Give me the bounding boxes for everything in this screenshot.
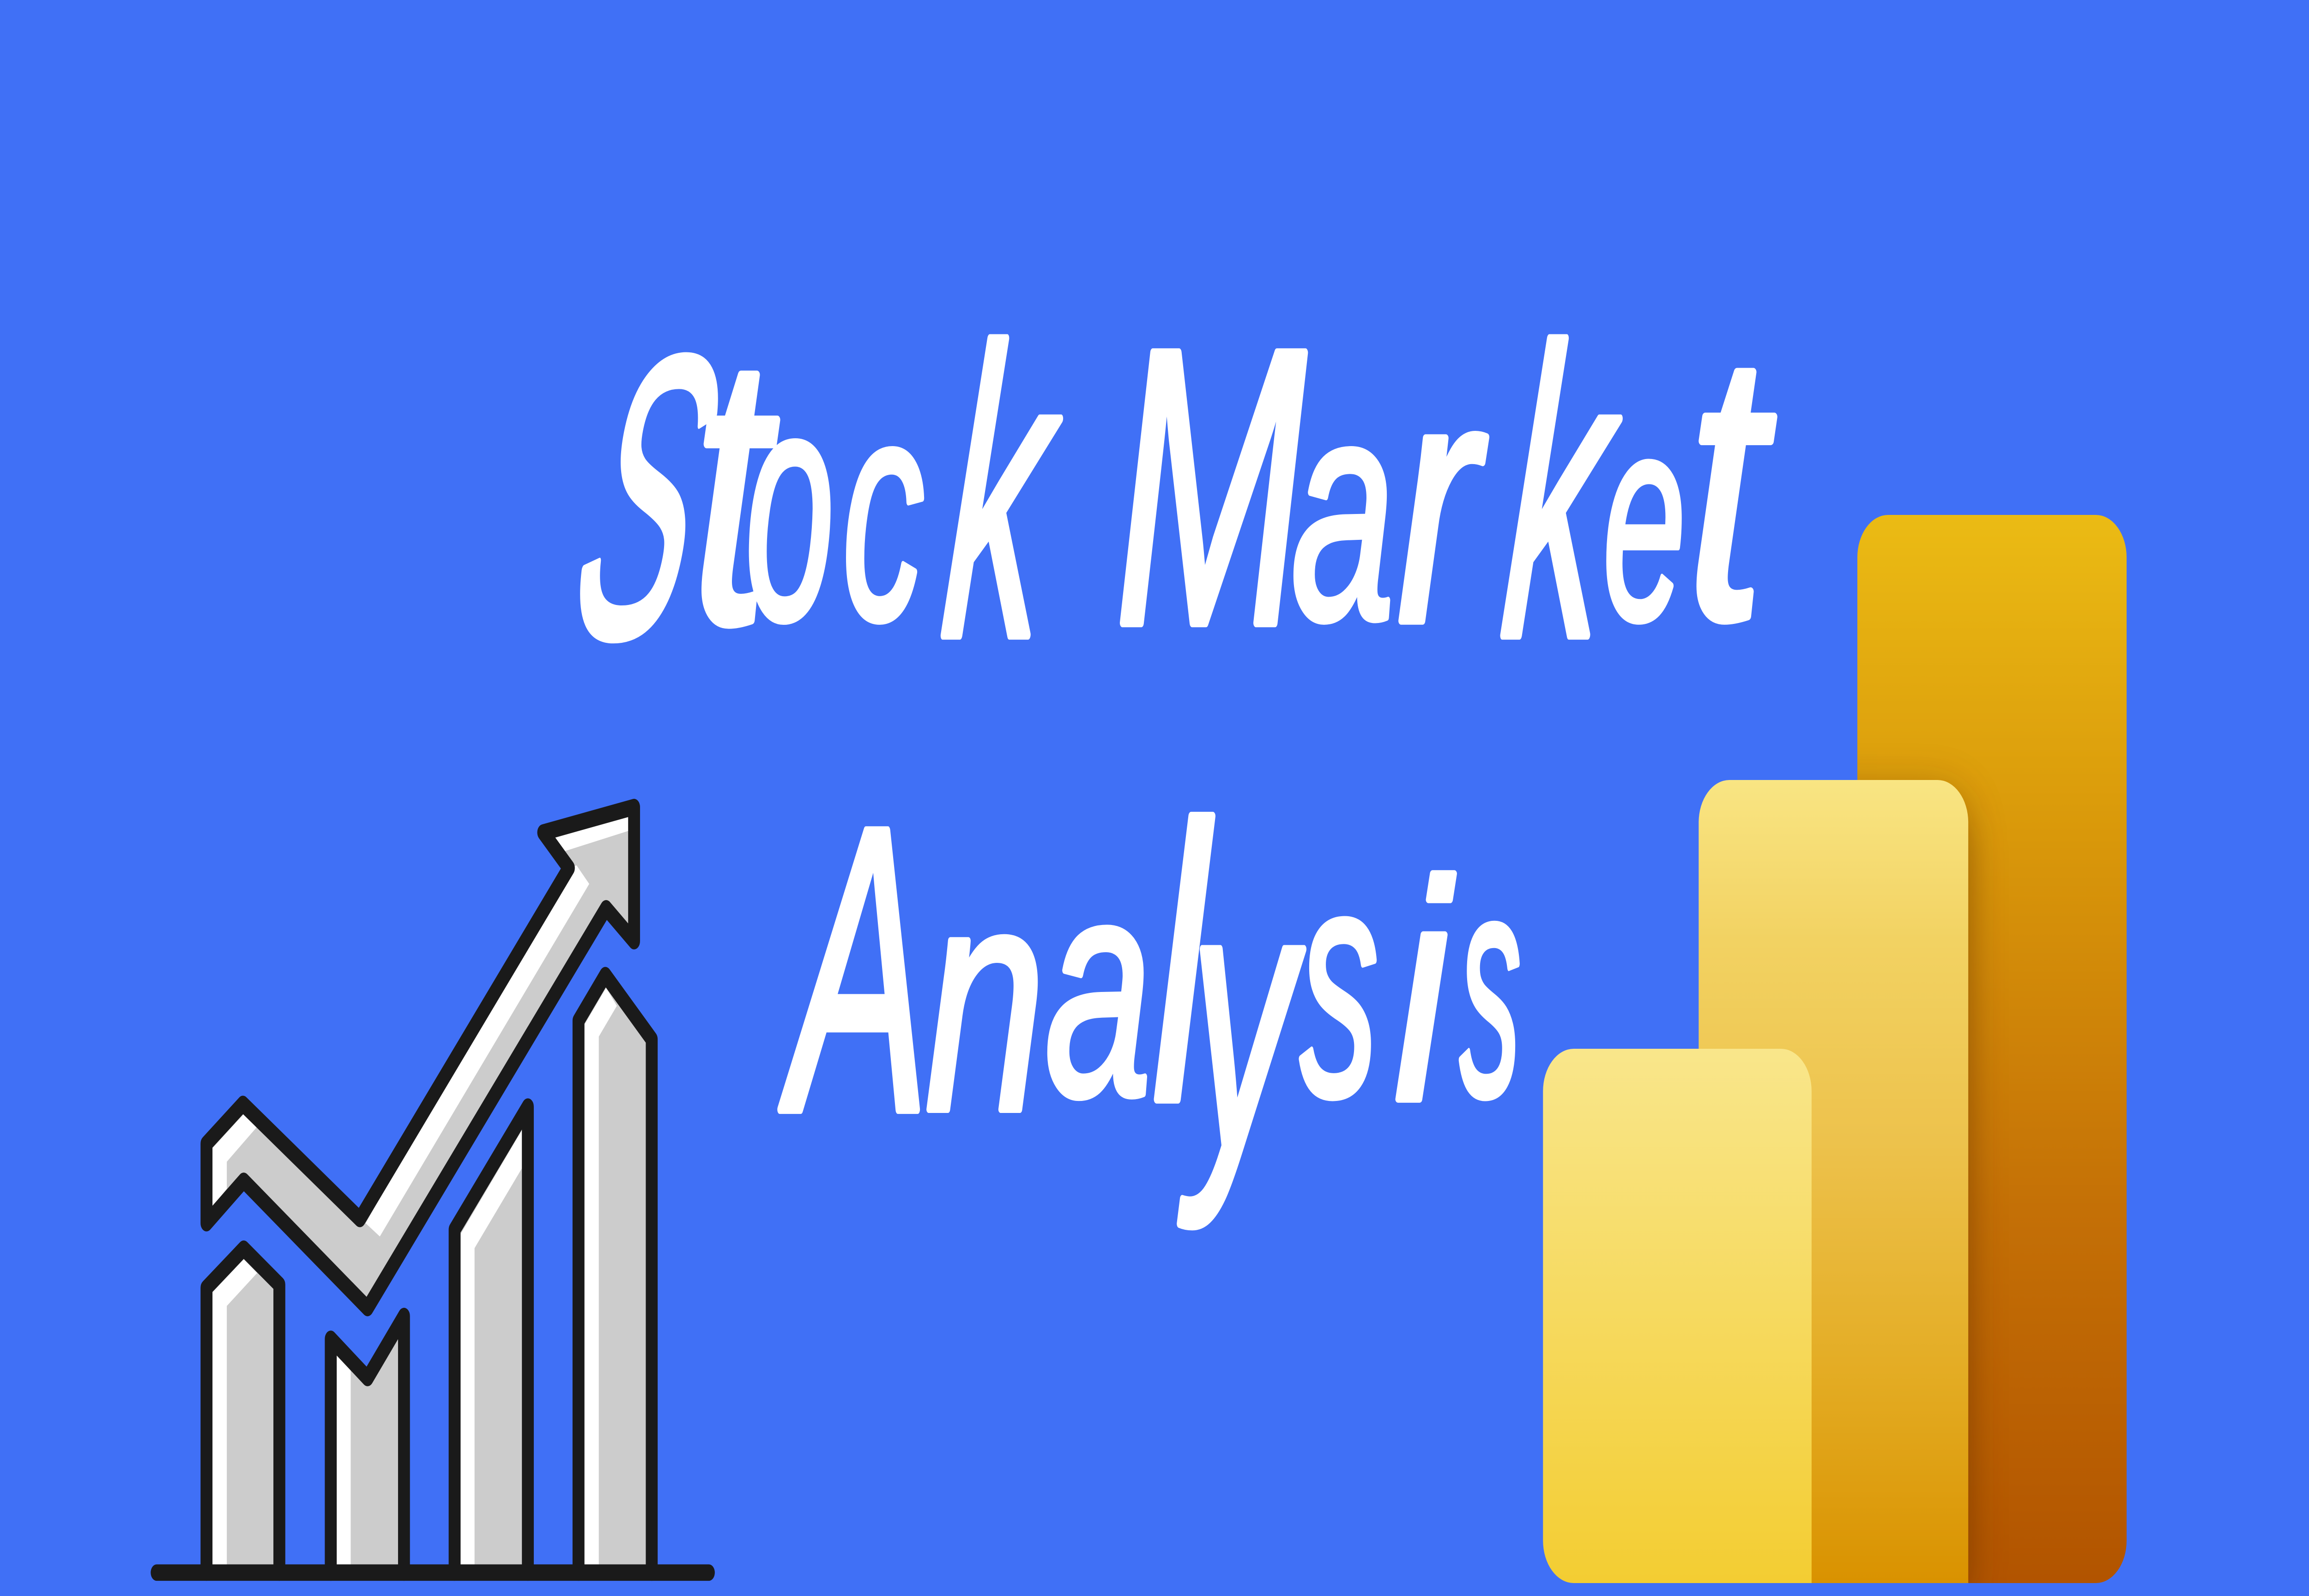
title line 1: Stock Market <box>550 265 1774 722</box>
bar 1 <box>206 1249 279 1572</box>
bar 4 <box>579 975 652 1572</box>
title line 1: Stock Market: S <box>550 274 744 719</box>
logo front bar <box>1543 1049 1812 1583</box>
title line 2: Analysis <box>777 743 1521 1231</box>
title line 1: Stock Market: e <box>1603 356 1686 681</box>
title line 1: Stock Market: t <box>1687 274 1774 697</box>
title line 1: Stock Market: k <box>934 265 1072 722</box>
title line 2: Analysis: y <box>1178 808 1307 1231</box>
title line 1: Stock Market: k <box>1493 265 1631 722</box>
bar 3 <box>454 1106 528 1572</box>
title line 2: Analysis: s <box>1300 800 1378 1164</box>
title line 2: Analysis: A <box>777 743 929 1196</box>
logo back bar <box>1857 515 2127 1583</box>
title: Stock Market Analysis <box>550 265 1774 1231</box>
bar 2 <box>331 1316 404 1572</box>
title line 2: Analysis: s <box>1460 808 1521 1162</box>
title line 1: Stock Market: t <box>692 276 777 701</box>
title line 2: Analysis: n <box>925 821 1045 1178</box>
infographic canvas <box>151 334 2127 1583</box>
title line 2: Analysis: a <box>1045 815 1152 1161</box>
title line 1: Stock Market: o <box>745 322 834 688</box>
chart baseline <box>157 1566 709 1580</box>
title line 1: Stock Market: a <box>1291 335 1395 685</box>
title line 1: Stock Market: c <box>842 334 924 685</box>
title line 2: Analysis: i <box>1394 817 1456 1166</box>
logo middle bar <box>1699 780 1968 1583</box>
logo middle bar shadow <box>1857 769 1989 1583</box>
trend arrow <box>206 807 634 1308</box>
title line 2: Analysis: l <box>1153 745 1214 1182</box>
icon: Power BI logo <box>1543 515 2127 1596</box>
title line 1: Stock Market: r <box>1397 308 1489 695</box>
title line 1: Stock Market: M <box>1115 268 1308 707</box>
icon: rising bar chart with arrow <box>157 807 709 1572</box>
